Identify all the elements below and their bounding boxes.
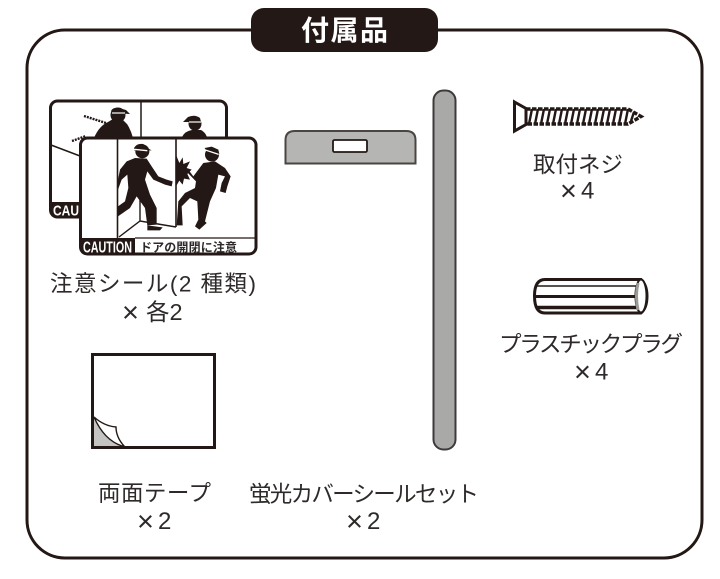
icon: back caution sticker: CAU	[53, 202, 79, 220]
heading: accessories title: 付属品	[301, 15, 388, 46]
text: fluorescent cover seal label: 蛍光カバーシールセット	[249, 482, 479, 507]
text: fluorescent cover seal label: ×	[346, 506, 363, 538]
icon: front caution sticker	[80, 138, 257, 256]
text: plug label	[499, 332, 683, 388]
icon: screw	[514, 102, 641, 131]
icon: double-sided tape	[92, 354, 214, 448]
text: caution sticker label: 各2	[146, 299, 183, 325]
text: plug label: ×	[574, 356, 591, 388]
icon: plastic plug	[534, 280, 647, 313]
text: plug label: プラスチックプラグ	[499, 332, 683, 357]
icon: person hit by door	[177, 147, 231, 230]
text: screw label: ×	[560, 176, 577, 208]
text: caution sticker label: ×	[122, 297, 139, 329]
text: tape label: 2	[158, 508, 171, 535]
text: screw label: 取付ネジ	[533, 152, 623, 178]
text: fluorescent cover seal label: 2	[367, 508, 380, 535]
text: tape label: 両面テープ	[98, 481, 211, 506]
icon: fluorescent cover bar	[434, 90, 456, 450]
text: plug label: 4	[595, 358, 608, 386]
icon: front caution sticker: CAUTION	[83, 240, 132, 256]
text: caution sticker label	[50, 272, 256, 329]
text: screw label	[533, 152, 623, 208]
text: fluorescent cover seal label	[249, 482, 479, 538]
icon: front caution sticker: ドアの開閉に注意	[140, 240, 237, 254]
heading: accessories title	[251, 8, 438, 52]
text: caution sticker label: 注意シール(2 種類)	[50, 272, 256, 296]
icon: caution stickers	[50, 90, 683, 538]
icon: impact burst	[176, 155, 192, 186]
text: tape label	[98, 481, 211, 538]
text: tape label: ×	[137, 506, 154, 538]
icon: person walking through door	[118, 144, 173, 230]
icon: back caution sticker	[50, 101, 226, 220]
text: screw label: 4	[581, 178, 594, 204]
icon: bracket	[286, 131, 416, 164]
